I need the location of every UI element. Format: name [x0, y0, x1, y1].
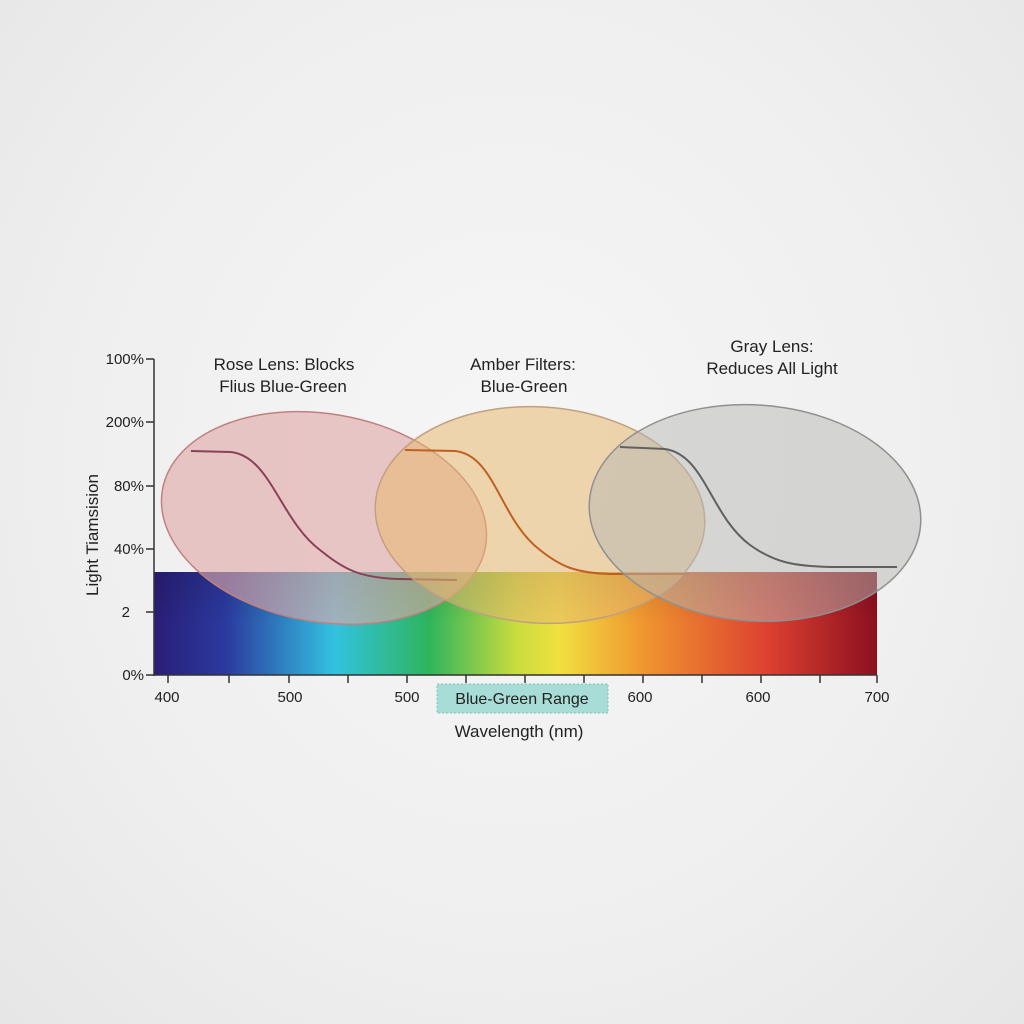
label: rose lens: Rose Lens: Blocks — [214, 355, 354, 374]
blue-green range highlight — [437, 684, 608, 713]
label: gray lens: Reduces All Light — [706, 359, 838, 378]
x-axis labels: 500 — [394, 689, 420, 706]
x-axis labels — [154, 689, 890, 706]
y-axis labels — [106, 351, 144, 684]
label: amber filters — [470, 355, 576, 396]
x-axis labels: 400 — [154, 689, 180, 706]
y-axis labels: 200% — [106, 414, 144, 431]
axes — [146, 359, 877, 683]
y-axis labels: 0% — [122, 667, 144, 684]
x-axis labels: 600 — [627, 689, 653, 706]
label: amber filters: Amber Filters: — [470, 355, 576, 374]
spectrum bar — [154, 572, 877, 675]
y-axis title: Light Tiamsision — [83, 474, 102, 596]
label: rose lens — [214, 355, 354, 396]
y-axis labels: 80% — [114, 478, 144, 495]
y-axis labels: 2 — [122, 604, 130, 621]
x-axis labels: 500 — [277, 689, 303, 706]
label: gray lens: Gray Lens: — [730, 337, 814, 356]
label: gray lens — [706, 337, 838, 378]
lens: amber — [368, 396, 712, 634]
y-axis labels: 40% — [114, 541, 144, 558]
label: rose lens: Flius Blue-Green — [219, 377, 347, 396]
x-axis title: Wavelength (nm) — [455, 722, 583, 741]
x-axis labels: 700 — [864, 689, 890, 706]
y-axis labels: 100% — [106, 351, 144, 368]
blue-green range highlight: Blue-Green Range — [455, 691, 589, 708]
x-axis labels: 600 — [745, 689, 771, 706]
lens: rose — [144, 387, 504, 649]
label: amber filters: Blue-Green — [481, 377, 567, 396]
lens: gray — [582, 394, 928, 632]
